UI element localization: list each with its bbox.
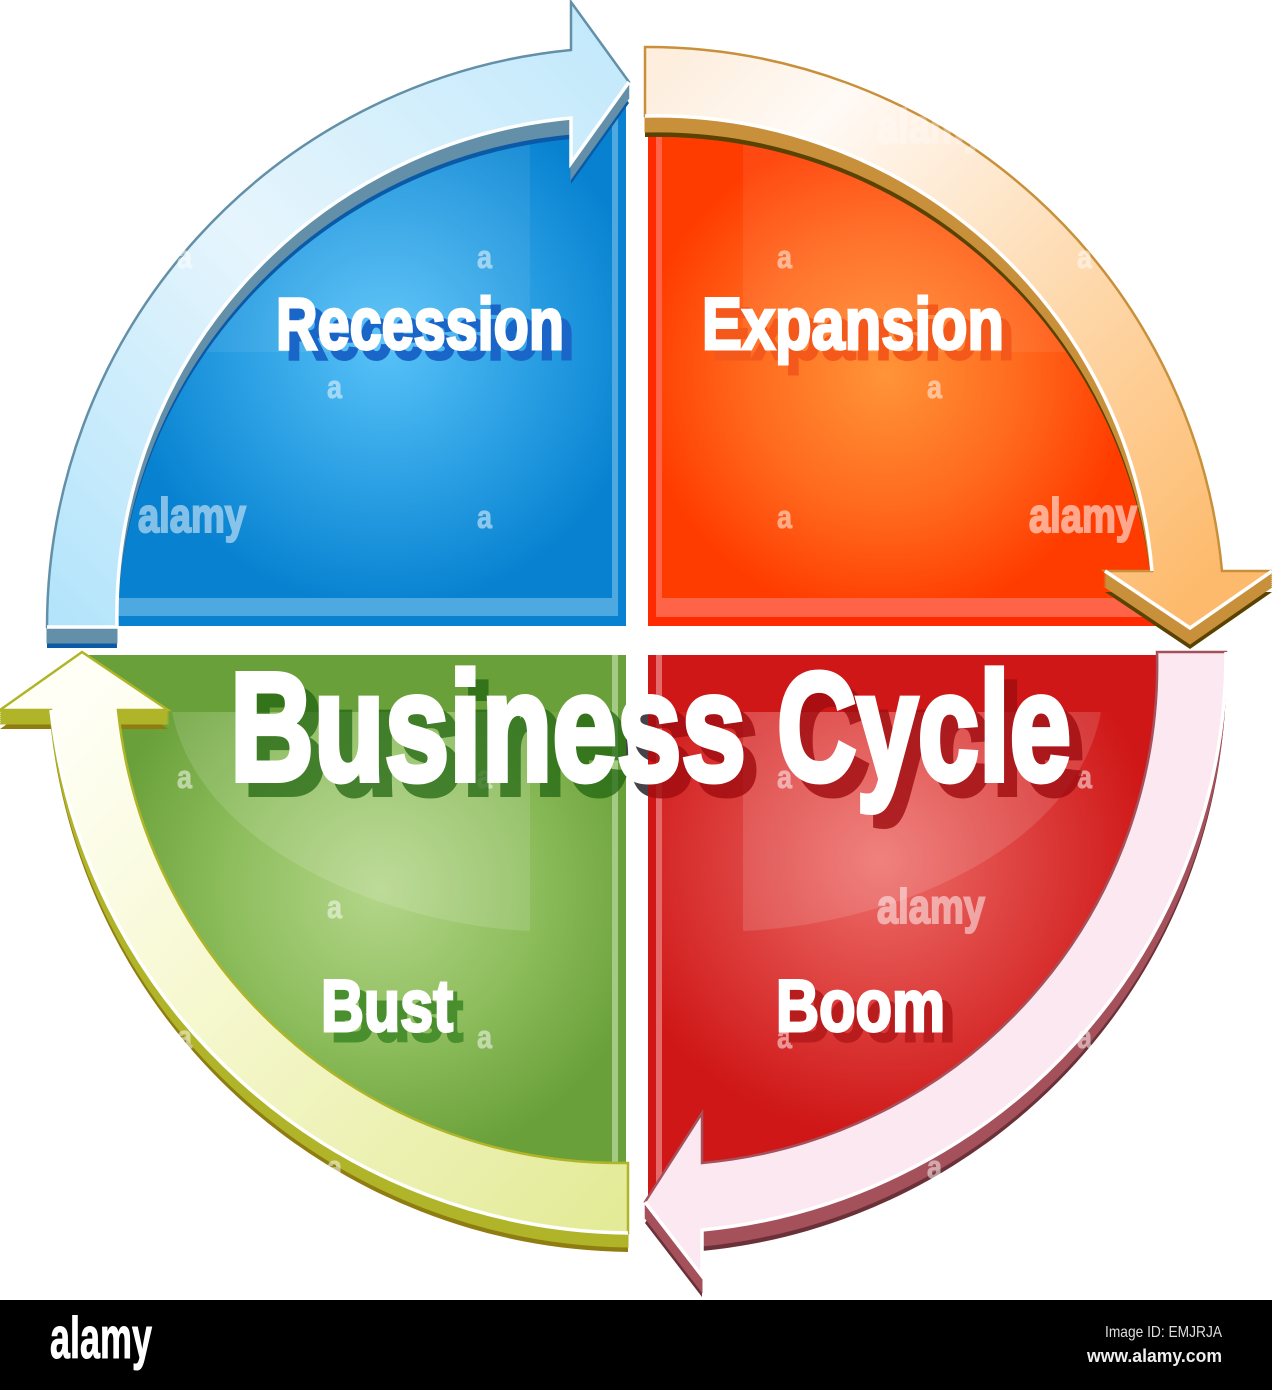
- watermark: alamy repeats: a: [327, 1149, 342, 1185]
- arrow: boom to bust: [645, 652, 1226, 1297]
- watermark: alamy repeats: a: [1077, 239, 1092, 275]
- watermark: alamy repeats: a: [477, 499, 492, 535]
- watermark: alamy repeats: a: [477, 239, 492, 275]
- title: Business Cycle: Business: [243, 655, 759, 827]
- footer: website: www.alamy.com: [1086, 1346, 1222, 1366]
- label: Expansion: Expansion: [702, 284, 1004, 365]
- label: Bust: Bust: [331, 976, 463, 1057]
- panel: recession quadrant: [118, 107, 626, 626]
- panel: boom quadrant: [648, 655, 1190, 1195]
- watermark: alamy repeats: alamy: [877, 101, 985, 154]
- label: Bust: Bust: [321, 966, 453, 1047]
- title: Business Cycle: Business: [230, 641, 746, 813]
- arrow: expansion to boom: [645, 47, 1272, 649]
- watermark: alamy repeats: a: [1077, 1019, 1092, 1055]
- footer logo: alamy: alamy: [50, 1306, 152, 1371]
- label: Boom: Boom: [786, 976, 955, 1057]
- title: Business Cycle: Cycle: [790, 655, 1084, 827]
- panel: bust quadrant: [80, 655, 626, 1195]
- watermark: alamy repeats: a: [777, 1019, 792, 1055]
- panel: expansion quadrant: [648, 136, 1156, 626]
- watermark: alamy repeats: a: [1077, 759, 1092, 795]
- watermark: alamy repeats: a: [777, 759, 792, 795]
- title: Business Cycle: Business: [243, 655, 759, 827]
- watermark: alamy repeats: a: [177, 239, 192, 275]
- title: Business Cycle: Business: [243, 655, 759, 827]
- watermark: alamy repeats: a: [327, 889, 342, 925]
- watermark: alamy repeats: a: [777, 239, 792, 275]
- label: Boom: Boom: [776, 966, 945, 1047]
- footer: image id: Image ID: EMJRJA: [1105, 1324, 1222, 1341]
- label: Expansion: Expansion: [712, 294, 1014, 375]
- watermark: alamy repeats: a: [777, 499, 792, 535]
- watermark: alamy repeats: alamy: [1029, 490, 1137, 543]
- arrow: recession to expansion: [47, 2, 629, 648]
- watermark: alamy repeats: a: [177, 1019, 192, 1055]
- label: Recession: Recession: [276, 284, 564, 365]
- watermark: alamy repeats: alamy: [877, 881, 985, 934]
- watermark: alamy repeats: a: [477, 759, 492, 795]
- watermark: alamy repeats: a: [927, 1149, 942, 1185]
- watermark: alamy repeats: a: [177, 759, 192, 795]
- watermark: alamy repeats: [138, 101, 1137, 1185]
- watermark: alamy repeats: a: [477, 1019, 492, 1055]
- watermark: alamy repeats: alamy: [138, 490, 246, 543]
- footer bar: [0, 1300, 1272, 1390]
- watermark: alamy repeats: a: [927, 369, 942, 405]
- title: Business Cycle: Cycle: [777, 641, 1071, 813]
- arrow: bust to recession: [0, 652, 628, 1252]
- label: Recession: Recession: [286, 294, 574, 375]
- watermark: alamy repeats: a: [327, 369, 342, 405]
